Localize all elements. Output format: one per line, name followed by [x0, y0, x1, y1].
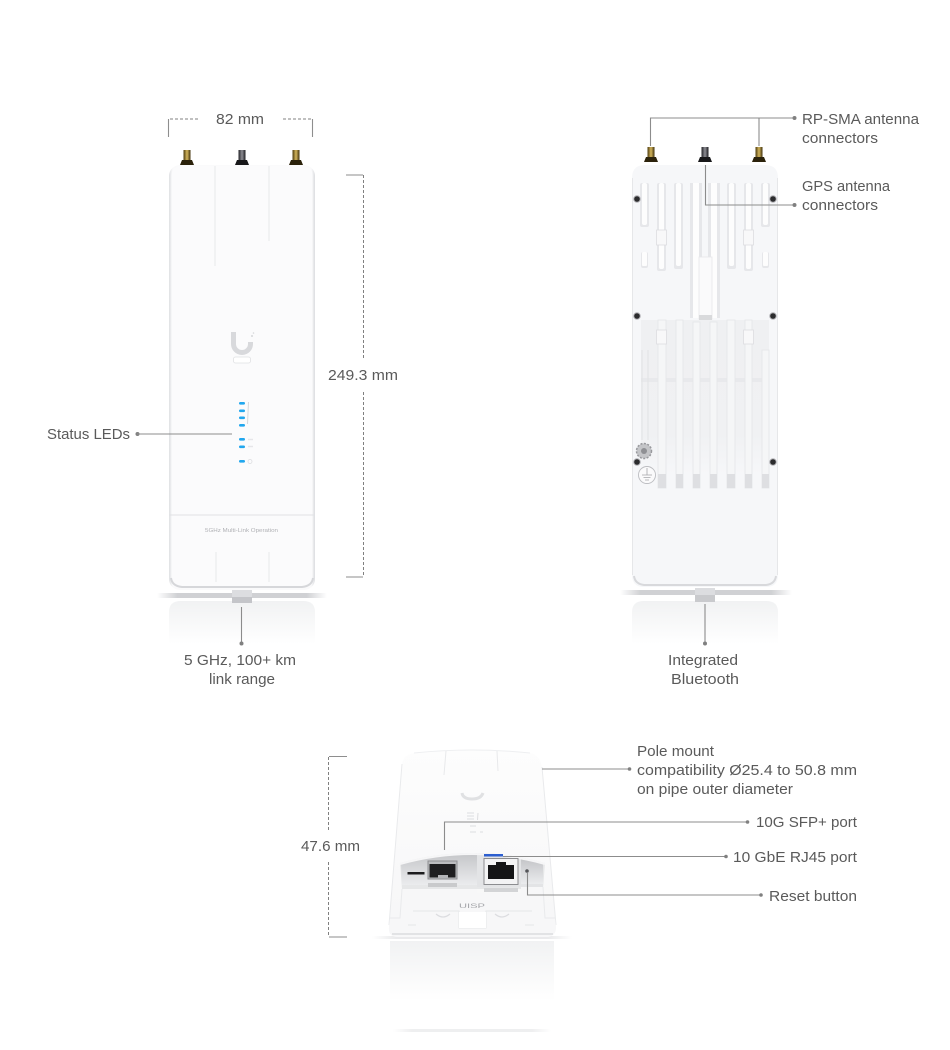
- front mounting foot: [232, 590, 252, 603]
- back view device: [620, 147, 792, 644]
- upper mounting ribs: [640, 183, 770, 320]
- back reflection: [632, 601, 778, 644]
- callout: 5 GHz link range: [184, 607, 296, 688]
- callout: GPS antenna connectors: [706, 165, 891, 214]
- right port panel: [477, 853, 543, 887]
- callout: 10G SFP+ port: [444, 814, 858, 850]
- front antenna connectors: [180, 150, 303, 165]
- front reflection: [169, 601, 315, 644]
- slot: [408, 872, 424, 874]
- callout: 5 GHz link range: 5 GHz, 100+ km: [184, 652, 296, 669]
- callout: RP-SMA antenna connectors: connectors: [802, 130, 878, 147]
- left port panel: [401, 853, 477, 885]
- width dimension: 82 mm: 82 mm: [216, 111, 264, 128]
- back enclosure: [632, 165, 778, 587]
- callout: RP-SMA antenna connectors: [650, 111, 920, 147]
- callout: GPS antenna connectors: connectors: [802, 197, 878, 214]
- reset button: [525, 869, 529, 873]
- icon: U logo: [234, 332, 254, 363]
- bottom cover: UISP: [459, 904, 485, 910]
- callout: reset button: [528, 873, 857, 905]
- mounting screws: [634, 196, 776, 465]
- front floor shadow: [157, 593, 327, 598]
- lid LED window: [467, 813, 483, 832]
- callout: pole mount: [542, 743, 857, 798]
- callout: 5 GHz link range: link range: [209, 671, 275, 688]
- port view device: [372, 750, 572, 1032]
- back floor shadow: [620, 590, 792, 595]
- lip: [400, 854, 545, 864]
- callout: 10 GbE RJ45 port: 10 GbE RJ45 port: [733, 849, 858, 866]
- callout: integrated Bluetooth: [668, 604, 739, 688]
- RJ45 port: [484, 854, 518, 892]
- status LED column: [239, 402, 253, 464]
- port view floor shadow: [372, 936, 572, 939]
- port view reflection edge: [393, 1029, 551, 1032]
- callout: RP-SMA antenna connectors: RP-SMA antenna: [802, 111, 920, 128]
- icon: grounding bolt and symbol: [636, 444, 656, 484]
- small logo on lid: [462, 793, 483, 799]
- front view device: [157, 150, 327, 644]
- callout: status LEDs: Status LEDs: [47, 426, 130, 443]
- callout: 10 GbE RJ45 port: [503, 849, 858, 866]
- callout: 10G SFP+ port: 10G SFP+ port: [756, 814, 858, 831]
- bottom cover: [389, 887, 556, 937]
- port well: [400, 853, 545, 889]
- callout: pole mount: compatibility Ø25.4 to 50.8 mm: [637, 762, 857, 779]
- height dimension: 47.6 mm: 47.6 mm: [301, 838, 360, 855]
- callout: integrated Bluetooth: Bluetooth: [671, 671, 739, 688]
- lower mounting ribs: [641, 320, 769, 488]
- back antenna connectors: [644, 147, 766, 162]
- front enclosure: [169, 165, 315, 590]
- callout: status LEDs: [47, 426, 232, 443]
- callout: pole mount: Pole mount: [637, 743, 715, 760]
- callout: reset button: Reset button: [769, 888, 857, 905]
- port view reflection: [390, 941, 554, 1001]
- callout: GPS antenna connectors: GPS antenna: [802, 178, 891, 195]
- front product label: 5GHz Multi-Link Operation: [205, 528, 278, 534]
- SFP+ port: [428, 861, 457, 887]
- callout: pole mount: on pipe outer diameter: [637, 781, 793, 798]
- height dimension: 249.3 mm: 249.3 mm: [328, 367, 398, 384]
- back mounting foot: [695, 588, 715, 602]
- callout: integrated Bluetooth: Integrated: [668, 652, 738, 669]
- port view enclosure: [389, 750, 556, 937]
